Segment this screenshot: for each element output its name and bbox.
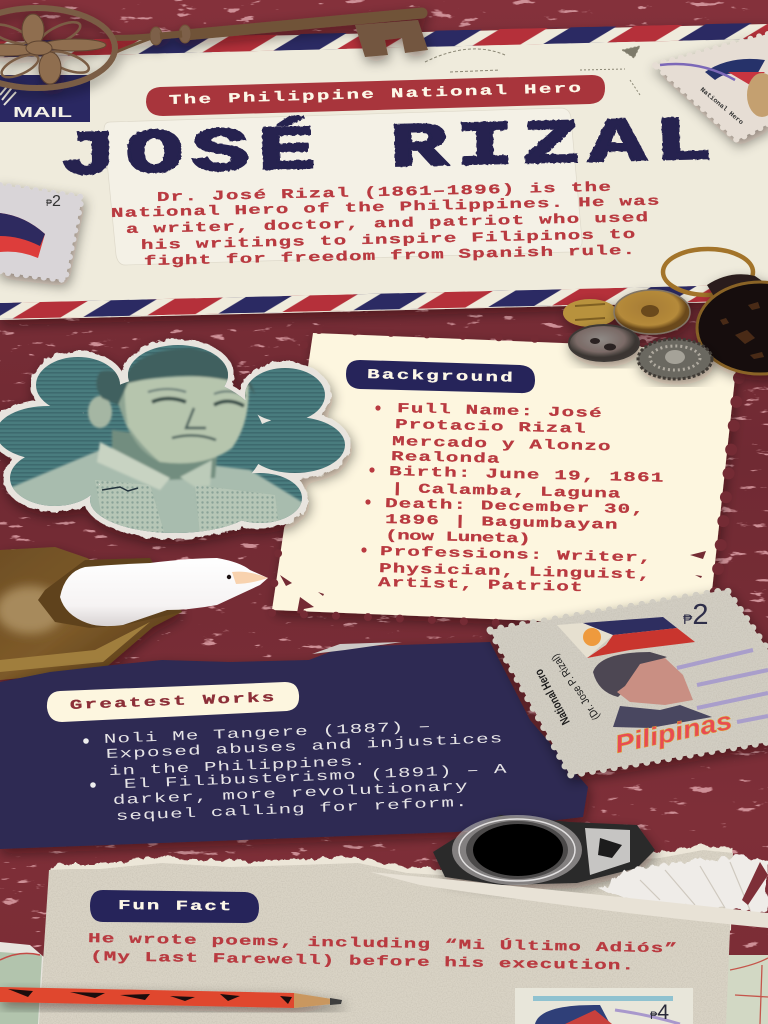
portrait torn border xyxy=(0,339,351,539)
hair xyxy=(96,348,255,405)
neck xyxy=(112,430,218,480)
stamp postmark lines xyxy=(677,650,768,722)
fun fact pill xyxy=(90,890,259,923)
stamp: left: ₱2 xyxy=(46,193,61,210)
panel: fun fact xyxy=(39,845,733,1024)
background list: Realonda xyxy=(391,449,500,467)
background list: 1896 | Bagumbayan xyxy=(385,512,618,533)
collar xyxy=(97,442,170,490)
signature xyxy=(102,487,138,491)
eyes xyxy=(152,398,244,406)
torn paper edge xyxy=(49,845,733,930)
candle xyxy=(0,547,268,680)
postmark xyxy=(425,49,505,72)
greatest works pill xyxy=(47,682,299,722)
stamp brand: Pilipinas xyxy=(612,707,735,759)
background list: Mercado y Alonzo xyxy=(392,434,611,455)
subtitle pill: The Philippine National Hero xyxy=(169,81,581,109)
brass ring xyxy=(663,249,753,295)
fun fact text xyxy=(88,930,677,974)
stamp: top right xyxy=(655,34,768,140)
address window xyxy=(104,108,582,265)
air mail patch: MAIL xyxy=(13,104,72,121)
works list: sequel calling for reform. xyxy=(116,795,468,825)
compass disc xyxy=(697,274,768,374)
works list xyxy=(83,719,507,825)
background list: | Calamba, Laguna xyxy=(391,481,621,502)
key bit xyxy=(355,20,428,57)
stamp profile portrait xyxy=(593,652,712,728)
buttons and compass xyxy=(563,249,768,379)
stamp flag xyxy=(557,617,695,658)
air mail patch xyxy=(0,75,90,122)
fun fact text: He wrote poems, including “Mi Último Adiós” xyxy=(88,930,677,957)
background list: Full Name: José xyxy=(397,401,602,422)
title: JOSÉ RIZAL xyxy=(59,106,713,193)
pencil xyxy=(0,987,342,1008)
ear xyxy=(88,396,112,428)
stamp: Pilipinas xyxy=(490,590,768,775)
stamp: bottom xyxy=(515,988,693,1024)
fun fact pill: Fun Fact xyxy=(118,898,231,915)
key shaft xyxy=(113,13,422,52)
intro text: Dr. José Rizal (1861–1896) is the xyxy=(157,180,611,206)
face xyxy=(115,376,249,463)
stamp caption: National Hero xyxy=(532,667,573,727)
works list: in the Philippines. xyxy=(109,754,366,780)
works list: darker, more revolutionary xyxy=(113,779,468,809)
quill shaft xyxy=(370,872,768,928)
intro text: fight for freedom from Spanish rule. xyxy=(144,243,635,270)
airmail stripes: bottom band xyxy=(0,283,768,322)
wick xyxy=(227,575,231,579)
shirt xyxy=(12,450,302,533)
silver button xyxy=(638,339,712,379)
coin xyxy=(563,299,617,327)
panel: background card xyxy=(271,330,739,632)
background list: Protacio Rizal xyxy=(395,417,586,437)
candle body xyxy=(60,558,268,626)
works list: El Filibusterismo (1891) – A xyxy=(124,762,507,793)
background list: Death: December 30, xyxy=(385,496,644,518)
rusty button xyxy=(569,325,639,361)
intro text: his writings to inspire Filipinos to xyxy=(141,227,635,254)
map scrap: left xyxy=(0,942,45,1024)
panel: envelope xyxy=(0,21,768,322)
background list: (now Luneta) xyxy=(385,528,531,547)
background list: Physician, Linguist, xyxy=(379,561,650,583)
intro text xyxy=(111,180,660,270)
background list xyxy=(361,401,664,596)
key bow xyxy=(0,8,115,88)
key xyxy=(0,8,428,88)
greatest works pill: Greatest Works xyxy=(70,690,275,714)
background heading pill: Background xyxy=(367,367,513,386)
map scrap: right xyxy=(724,955,768,1024)
quill feather xyxy=(370,857,768,928)
gold button xyxy=(614,290,690,334)
flame xyxy=(232,572,268,584)
inkwell xyxy=(433,815,655,885)
panel: greatest works xyxy=(0,642,588,849)
airmail stripes: top band xyxy=(0,21,768,59)
works list: Exposed abuses and injustices xyxy=(106,731,503,763)
stamp value: ₱2 xyxy=(683,599,708,631)
fun fact text: (My Last Farewell) before his execution. xyxy=(90,949,634,974)
portrait xyxy=(0,339,355,540)
intro text: a writer, doctor, and patriot who used xyxy=(126,210,648,238)
works list: Noli Me Tangere (1887) – xyxy=(104,719,431,748)
stamp: left xyxy=(0,185,82,280)
background list: Artist, Patriot xyxy=(378,575,583,596)
candle holder xyxy=(0,547,182,680)
mouth and nose xyxy=(172,408,216,440)
shirt dots xyxy=(95,480,280,535)
subtitle pill xyxy=(146,75,605,116)
stamp: top right: National Hero xyxy=(699,86,745,126)
feather plume xyxy=(597,857,768,912)
stamp: bottom: ₱4 xyxy=(650,1001,669,1024)
background list: Professions: Writer, xyxy=(380,544,651,566)
stamp: Pilipinas: (Dr. Jose P. Rizal) xyxy=(549,651,602,722)
background heading pill xyxy=(346,360,535,393)
background list: Birth: June 19, 1861 xyxy=(389,464,664,486)
intro text: National Hero of the Philippines. He was xyxy=(111,194,660,222)
